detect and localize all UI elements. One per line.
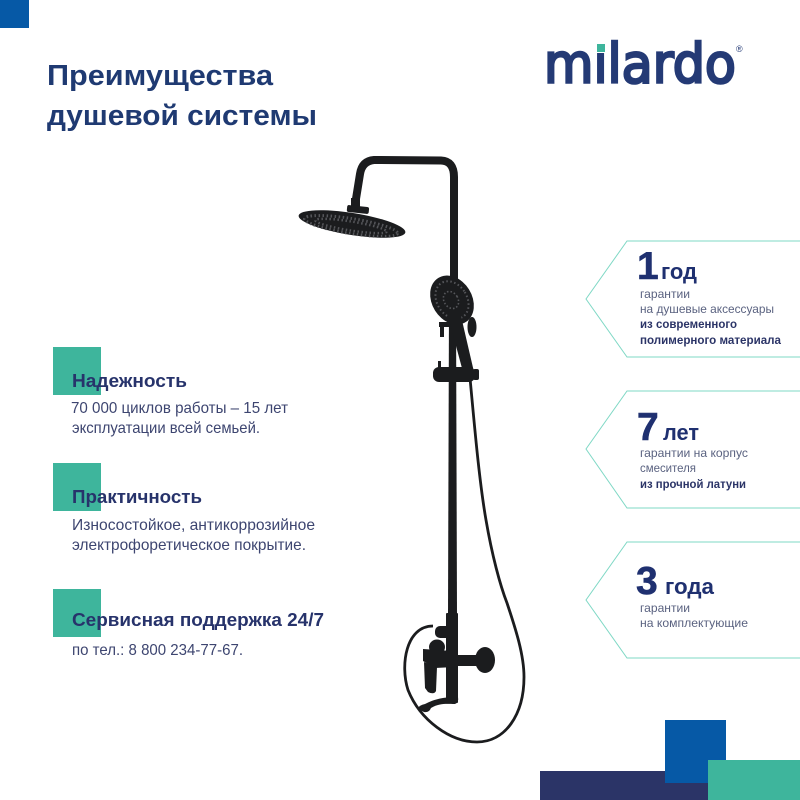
warranty card: 3 years: года [665,574,715,599]
panel: service support [53,589,324,659]
lower collar [446,613,458,703]
corner accent: top left [0,0,29,28]
slider [433,361,479,382]
panel: service support: по тел.: 8 800 234-77-67. [72,642,243,659]
warranty card: 1 year: из современного [640,317,737,331]
warranty card: 1 year: полимерного материала [640,333,781,347]
panel: practicality: Практичность [72,487,202,507]
overhead arm [355,160,454,285]
warranty card: 1 year: гарантии [640,287,690,301]
warranty card: 7 years: из прочной латуни [640,477,746,491]
title: душевой системы [47,100,317,132]
panel: practicality: электрофоретическое покрытие. [72,537,306,554]
panel: reliability: 70 000 циклов работы – 15 лет [71,400,289,417]
warranty card: 1 year: 1 [637,245,659,288]
panel: reliability [53,347,289,437]
corner accent: bottom right blocks [540,720,800,800]
warranty card: 1 year [586,241,800,357]
product illustration: shower system [297,160,524,742]
hand shower [421,267,483,372]
warranty card: 3 years: на комплектующие [640,616,748,630]
sliding rail [448,300,457,615]
warranty card: 7 years: 7 [637,406,659,449]
warranty card: 1 year: на душевые аксессуары [640,302,774,316]
panel: reliability: Надежность [72,371,187,391]
rail bracket [439,322,449,337]
warranty card: 7 years: гарантии на корпус [640,446,748,460]
mixer [423,640,495,693]
warranty card: 3 years: гарантии [640,601,690,615]
warranty card: 1 year: год [661,259,697,284]
panel: practicality: Износостойкое, антикоррозийное [72,517,315,534]
warranty card: 7 years: смесителя [640,461,696,475]
warranty card: 7 years [586,391,800,508]
logo: milardo: milardo [544,32,736,96]
panel: practicality [53,463,315,554]
spout [418,697,458,712]
title [47,60,317,132]
panel: reliability: эксплуатации всей семьей. [72,420,260,437]
hose [405,378,524,742]
rain shower head [297,198,407,243]
panel: service support: Сервисная поддержка 24/7 [72,610,324,630]
logo: milardo: ® [736,44,743,54]
title: Преимущества [47,60,274,92]
warranty card: 7 years: лет [663,420,699,445]
warranty card: 3 years [586,542,800,658]
warranty card: 3 years: 3 [636,560,658,603]
